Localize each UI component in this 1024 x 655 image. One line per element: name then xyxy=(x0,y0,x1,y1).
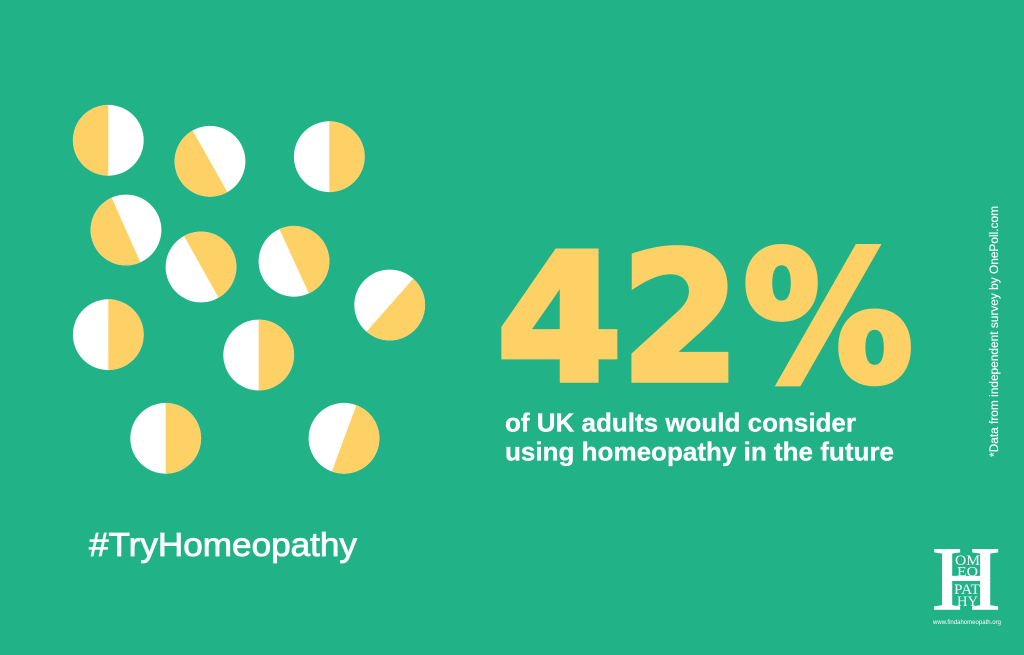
pill 9 xyxy=(223,320,294,390)
pill 5 xyxy=(166,232,236,302)
pill 7 xyxy=(354,270,426,340)
pill 3 xyxy=(294,121,365,192)
logo: inner letters: OM xyxy=(955,553,980,569)
statistic caption: of UK adults would consider xyxy=(505,408,856,438)
hashtag: #TryHomeopathy xyxy=(89,526,358,563)
logo: inner letters xyxy=(954,553,980,610)
pill 6 xyxy=(258,226,330,297)
pill 4 xyxy=(90,194,162,266)
big statistic: 42%: 2 xyxy=(621,216,740,422)
logo: website: www.findahomeopath.org xyxy=(932,620,1001,626)
pill group xyxy=(70,100,440,490)
statistic caption xyxy=(505,408,894,466)
logo: inner letters: EO xyxy=(957,564,978,579)
big statistic: 42%: % xyxy=(743,215,913,424)
statistic caption: using homeopathy in the future xyxy=(505,436,894,466)
pill 10 xyxy=(130,402,202,474)
pill 1 xyxy=(72,104,144,176)
logo: inner letters: PAT xyxy=(954,582,980,598)
big statistic: 42%: 4 xyxy=(496,218,622,422)
source note (vertical): *Data from independent survey by OnePoll.com xyxy=(989,206,1001,457)
pill 8 xyxy=(72,299,144,370)
pill 2 xyxy=(174,126,246,197)
logo: inner letters: HY xyxy=(957,594,978,610)
logo: large H: H xyxy=(932,529,1000,630)
pill 11 xyxy=(308,402,380,474)
big statistic: 42% xyxy=(496,215,913,424)
logo xyxy=(932,529,1001,630)
